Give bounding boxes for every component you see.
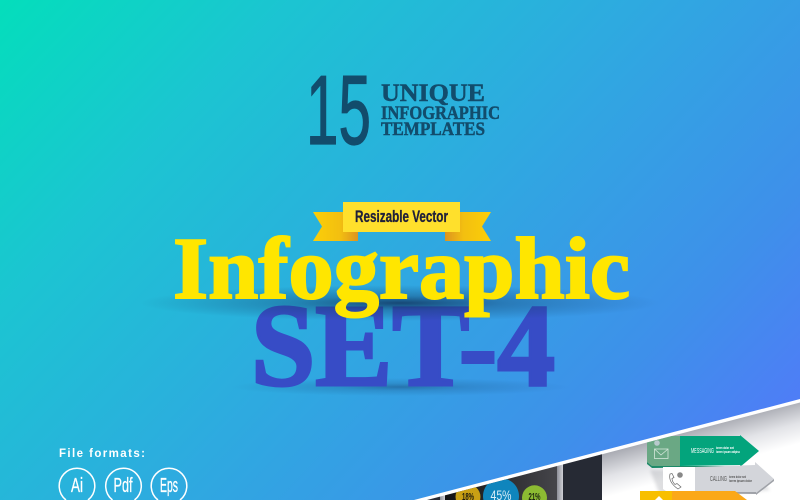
arrow: calling: lorem ipsum dolor [729, 479, 753, 483]
title: Infographic: Infographic [173, 221, 630, 318]
circle: 21% [522, 485, 547, 500]
info dot [677, 472, 683, 478]
icon: home [655, 496, 663, 500]
arrow: messaging [647, 435, 759, 468]
dark preview: right column [563, 454, 602, 500]
ribbon banner [343, 202, 460, 232]
heading lines [381, 80, 500, 140]
heading lines: TEMPLATES [381, 119, 485, 140]
circle: 18% [456, 487, 480, 500]
ribbon: resizable vector [313, 202, 491, 241]
arrow shadows [650, 470, 770, 497]
dark preview: left column [427, 496, 440, 500]
pillar [440, 495, 445, 500]
icon: phone [670, 474, 681, 489]
arrow: calling [663, 462, 774, 495]
ribbon right tail [445, 212, 491, 241]
grey backdrop [600, 402, 800, 492]
badge: Pdf: Pdf [114, 475, 133, 497]
file formats label: File formats: [59, 448, 145, 460]
corner preview panel [400, 395, 800, 500]
pillar [557, 464, 563, 500]
file formats [59, 448, 187, 500]
dark preview: chart panel [445, 466, 557, 500]
calling description: lorem dolor sed [729, 475, 746, 479]
number 15: 15 [306, 55, 371, 165]
arrow: messaging: lorem ipsum adipisc [716, 450, 740, 454]
info dot [654, 440, 660, 446]
messaging description: lorem dolor sed [716, 446, 734, 450]
circle: 45% [483, 478, 519, 500]
arrow: yellow [640, 491, 747, 500]
ribbon label: Resizable Vector [355, 208, 448, 226]
shadow under SET-4 [230, 378, 570, 396]
white diagonal edge [414, 399, 800, 500]
messaging label: MESSAGING [691, 446, 714, 455]
calling label: CALLING [710, 474, 727, 483]
icon: envelope [654, 449, 668, 458]
title: SET-4: SET-4 [251, 280, 555, 411]
heading: 15 unique infographic templates [306, 55, 500, 165]
badge: Ai: Ai [71, 475, 83, 497]
badge: Eps: Eps [160, 475, 178, 497]
heading lines: INFOGRAPHIC [381, 103, 500, 124]
shadow under Infographic [140, 285, 660, 321]
ribbon left tail [313, 212, 358, 241]
heading lines: UNIQUE [381, 80, 485, 107]
